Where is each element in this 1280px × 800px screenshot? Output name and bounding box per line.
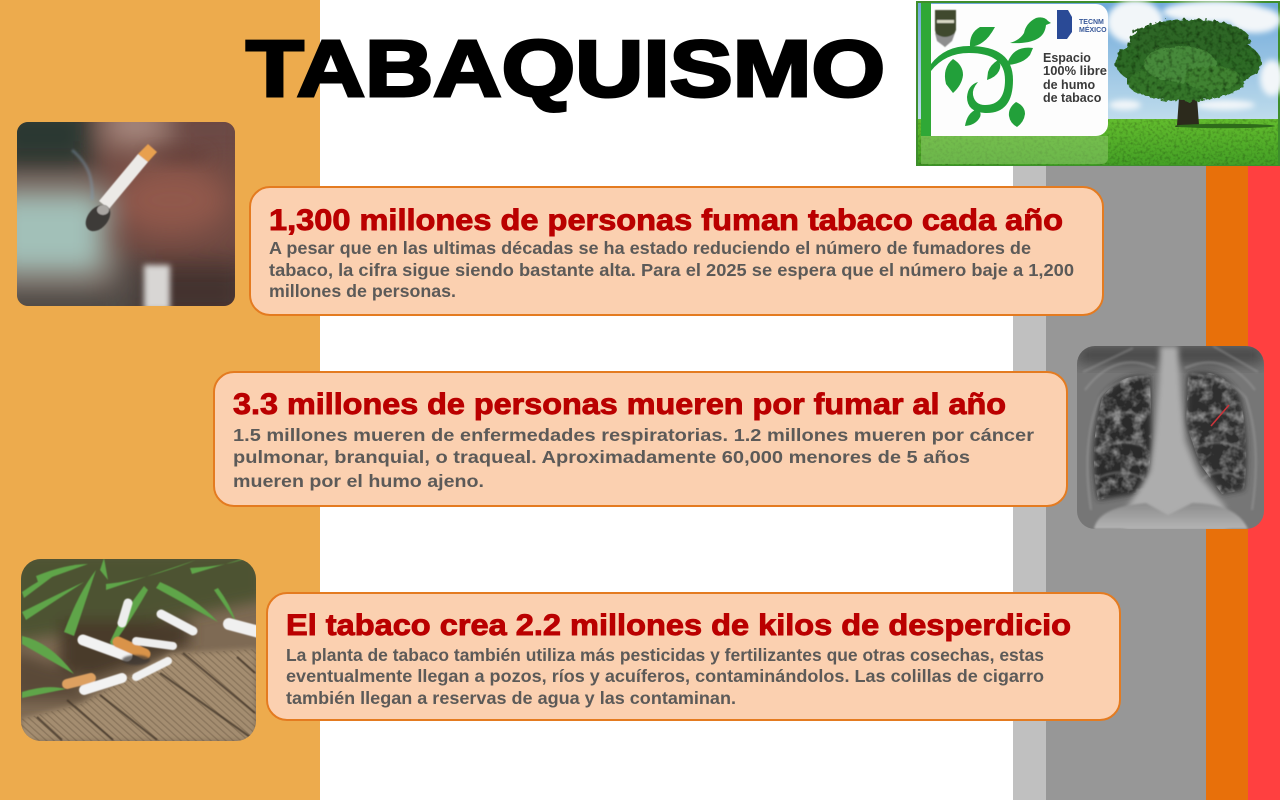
banner text: [1043, 51, 1107, 105]
photo: man smoking a cigarette: [17, 122, 235, 306]
card 2 body: 1.5 millones mueren de enfermedades respiratorias. 1.2 millones mueren por cáncer: [233, 425, 1034, 445]
card 1 body: tabaco, la cifra sigue siendo bastante alta. Para el 2025 se espera que el número baje a 1,200: [269, 260, 1074, 280]
card 3 body: eventualmente llegan a pozos, ríos y acuíferos, contaminándolos. Las colillas de cigarro: [286, 666, 1044, 686]
banner grass: [918, 119, 1278, 165]
card 3: [267, 593, 1120, 720]
card 2 heading: 3.3 millones de personas mueren por fumar al año: [233, 388, 1006, 421]
card 3 body: La planta de tabaco también utiliza más pesticidas y fertilizantes que otras cosechas, estas: [286, 645, 1044, 665]
x-ray mediastinum: [1125, 346, 1227, 531]
banner tree: [1115, 19, 1275, 128]
x-ray lungs: [1094, 372, 1246, 500]
banner text: de humo: [1043, 78, 1095, 92]
banner text: Espacio: [1043, 51, 1091, 65]
card 1 body: millones de personas.: [269, 281, 456, 301]
card 2 body: pulmonar, branquial, o traqueal. Aproximadamente 60,000 menores de 5 años: [233, 447, 970, 467]
card 2 body: [233, 425, 1034, 491]
card 1: [250, 187, 1103, 315]
logo banner: smoke-free space: [916, 0, 1280, 166]
icon: TecNM logo: TECNM: [1079, 19, 1104, 26]
card 1 heading: 1,300 millones de personas fuman tabaco cada año: [269, 204, 1063, 237]
card 3 heading: El tabaco crea 2.2 millones de kilos de desperdicio: [286, 609, 1071, 642]
card 3 body: [286, 645, 1044, 708]
icon: TecNM logo: [1057, 10, 1107, 39]
banner sky: [918, 3, 1278, 120]
card 3 body: también llegan a reservas de agua y las contaminan.: [286, 688, 736, 708]
photo: chest x-ray: [1077, 346, 1264, 531]
card 2 body: mueren por el humo ajeno.: [233, 471, 484, 491]
icon: school crest: [935, 10, 956, 47]
icon: TecNM logo: MÉXICO: [1079, 25, 1107, 34]
banner text: 100% libre: [1043, 64, 1107, 78]
background: right vertical stripes: [1013, 166, 1280, 800]
card 1 body: [269, 238, 1074, 301]
card 2: [214, 372, 1067, 506]
grass blades: [22, 556, 252, 698]
banner green side bar: [921, 3, 931, 136]
background: orange left band: [0, 0, 320, 800]
lips shadow: [154, 146, 194, 164]
banner text: de tabaco: [1043, 91, 1102, 105]
x-ray red arrow: [1211, 405, 1229, 426]
photo: discarded cigarette butts: [21, 559, 256, 741]
title: TABAQUISMO: [246, 24, 885, 113]
cigarette: [81, 144, 157, 236]
cigarette butts: [67, 603, 259, 690]
card 1 body: A pesar que en las ultimas décadas se ha estado reduciendo el número de fumadores de: [269, 238, 1031, 258]
pavement: [21, 649, 256, 741]
icon: green bird on a vine: [931, 17, 1051, 127]
banner white panel: [931, 4, 1108, 136]
